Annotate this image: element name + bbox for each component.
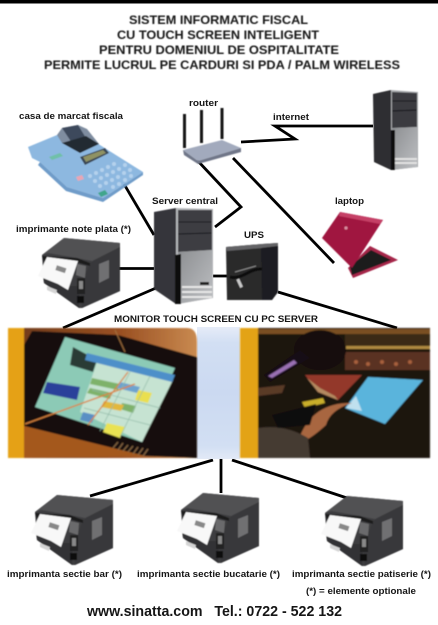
label: UPS: UPS — [244, 230, 264, 241]
icon: internet computer tower — [373, 90, 418, 170]
label: casa de marcat fiscala: casa de marcat fiscala — [19, 111, 124, 122]
label: imprimanta sectie bucatarie: imprimanta sectie bucatarie (*) — [137, 569, 280, 580]
note: optional elements: (*) = elemente optionale — [306, 586, 416, 597]
icon: central server tower — [154, 208, 213, 304]
label: laptop: laptop — [335, 196, 364, 207]
icon: UPS unit — [226, 243, 278, 300]
icon: wireless router — [183, 108, 241, 164]
icon: pastry section printer — [321, 496, 403, 566]
panel: center light blue strip — [197, 327, 240, 459]
panel: right photo operator at touch screen — [240, 328, 430, 458]
icon: receipt printer for bills — [38, 238, 120, 308]
label: Server central: Server central — [152, 196, 218, 207]
network cables — [63, 126, 397, 498]
panel: left photo touch screen — [8, 328, 197, 458]
top black bar — [0, 0, 438, 4]
title: SISTEM INFORMATIC FISCAL — [129, 13, 308, 27]
title: PENTRU DOMENIUL DE OSPITALITATE — [99, 43, 339, 57]
title: PERMITE LUCRUL PE CARDURI SI PDA / PALM WIRELESS — [44, 58, 400, 72]
footer contact: www.sinatta.com Tel.: 0722 - 522 132 — [86, 604, 342, 620]
title: CU TOUCH SCREEN INTELIGENT — [117, 28, 319, 42]
label: imprimante note plata: imprimante note plata (*) — [16, 224, 131, 235]
icon: bar section printer — [31, 495, 113, 565]
icon: red laptop — [322, 212, 398, 278]
title — [44, 13, 400, 72]
icon: kitchen section printer — [177, 493, 259, 563]
label: imprimanta sectie bar: imprimanta sectie bar (*) — [7, 569, 122, 580]
label: router: router — [189, 98, 218, 109]
label: internet: internet — [273, 112, 310, 123]
label: monitor touch screen heading: MONITOR TOUCH SCREEN CU PC SERVER — [114, 314, 318, 325]
label: imprimanta sectie patiserie: imprimanta sectie patiserie (*) — [292, 569, 431, 580]
icon: fiscal cash register — [28, 125, 143, 202]
